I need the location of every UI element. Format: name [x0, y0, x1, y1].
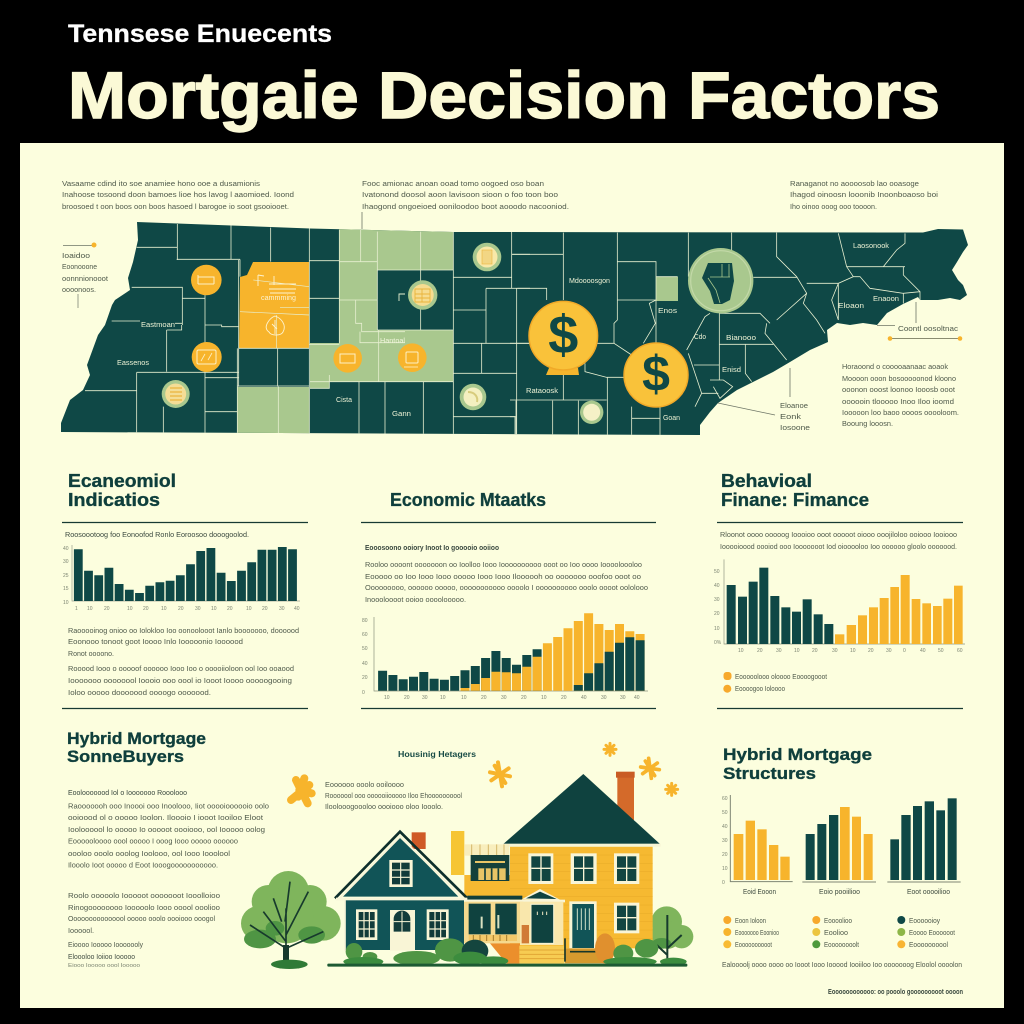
- axis labels: [714, 569, 963, 654]
- chart captions: [743, 887, 950, 896]
- roof: [503, 774, 660, 844]
- intro text right: Ranaganot no aoooosob lao ooasoge: [790, 179, 919, 188]
- blue house: [335, 832, 469, 951]
- stacked bar chart: 30: [501, 695, 507, 701]
- legend: Eoolioo: [824, 928, 848, 937]
- axis labels: 60: [722, 796, 728, 802]
- illustration: house, trees and decorations: [241, 743, 693, 969]
- legend: Eoooooioy: [909, 916, 940, 925]
- text block right of map: Iooooon loo baoo oooos ooooloom.: [842, 408, 959, 417]
- axis labels: 40: [714, 583, 720, 589]
- bar chart: [724, 559, 965, 644]
- chimney: [617, 777, 634, 820]
- legend: Eoooooooooot: [735, 940, 773, 949]
- map labels: Goan: [663, 415, 680, 422]
- callout: left map note: Eoonooone: [62, 262, 97, 271]
- text block one: Eoolooooood Iol o Iooooooo Rooolooo: [68, 788, 187, 797]
- stacked bar chart: 10: [440, 695, 446, 701]
- icon: green ring coin tiny: [580, 401, 603, 424]
- text block one: [68, 788, 269, 870]
- light green counties: [237, 228, 678, 437]
- axis labels: 40: [722, 824, 728, 830]
- axis labels: 30: [776, 648, 782, 654]
- legend: Eoooooooolt: [824, 940, 860, 949]
- icon: green ring coin small: [460, 384, 486, 410]
- legend: Eoooolioo: [824, 916, 852, 925]
- stacked bar chart: 0: [362, 690, 365, 696]
- chart intro and text: Eooosoono ooiory Inoot Io gooooio ooiioo: [365, 543, 499, 552]
- intro text left: [62, 179, 294, 211]
- text block: [68, 626, 299, 697]
- heading: Indicatios: [68, 490, 160, 510]
- housing text: Rooooool ooo oooooiiooooo Iloo Ehoooooooool: [325, 791, 462, 800]
- legend: [723, 916, 956, 949]
- bar chart: 10: [211, 606, 217, 612]
- axis labels: 20: [812, 648, 818, 654]
- bar chart: 30: [279, 606, 285, 612]
- intro text left: Inahoose tosoond doon bamoes lioe hos lavog l aaomioed. Ioond: [62, 190, 294, 199]
- chart A: [730, 795, 793, 882]
- legend: Eoooogoo Ioloooo: [735, 684, 785, 693]
- axis labels: 0%: [714, 640, 722, 646]
- housing text: Iloolooogoooloo oooiooo oloo Iooolo.: [325, 802, 443, 811]
- bar chart: 20: [178, 606, 184, 612]
- axis labels: [722, 796, 728, 886]
- icon: yellow circle monitor: [333, 344, 362, 373]
- heading: [67, 729, 206, 766]
- chart captions: Eoot ooooilioo: [907, 887, 950, 896]
- chart captions: Eoid Eooon: [743, 887, 776, 896]
- county lines east: [510, 233, 920, 435]
- source line: Eoooooooooooo: oo pooolo gooooooooot oooon: [828, 987, 963, 996]
- icon: yellow circle house: [191, 265, 222, 295]
- icon: dollar coin 2: $: [642, 346, 670, 402]
- icon: dollar coin 1: [529, 301, 598, 375]
- subtitle: Tennsese Enuecents: [68, 20, 332, 48]
- porch: [464, 889, 565, 945]
- intro text right: [790, 179, 938, 211]
- stacked bar chart: 40: [362, 661, 368, 667]
- text block one: Iooloooool lo ooooo Io ooooot oooiooo, ool Iooooo oolog: [68, 825, 265, 834]
- shrubs: [343, 938, 687, 966]
- text block two: Ooooooooooooool ooooo ooolo oooiooo ooogol: [68, 914, 215, 923]
- axis labels: 50: [714, 569, 720, 575]
- axis labels: 30: [714, 597, 720, 603]
- map labels: Eloaon: [838, 303, 864, 310]
- callout: left map note: oooonoos.: [62, 285, 96, 294]
- icon: green ring document 2: [473, 243, 501, 271]
- map base: [50, 215, 980, 440]
- stacked bar chart: 50: [362, 646, 368, 652]
- map labels: Gann: [392, 411, 411, 418]
- chart intro: Roosoootoog foo Eonoofod Ronlo Eoroosoo dooogoolod.: [65, 530, 249, 539]
- text block right of map: oooooin tlooooo Inoo Iloo ioomd: [842, 397, 954, 406]
- title: Mortgaie Decision Factors: [68, 58, 940, 132]
- bar chart: 1: [75, 606, 78, 612]
- axis labels: 0: [903, 648, 906, 654]
- map labels: [117, 243, 899, 422]
- map labels: Eastmoan: [141, 322, 175, 329]
- text block one: Eoooooloooo oool ooooo I ooog Iooo ooooo oooooo: [68, 836, 238, 846]
- ground: [327, 964, 687, 967]
- axis labels: 20: [722, 852, 728, 858]
- text block two: Eioooo Iooooo Iooooooly: [68, 940, 143, 949]
- stacked bar chart: 80: [362, 618, 368, 624]
- stacked bar chart: 10: [384, 695, 390, 701]
- legend: Eoooooooool: [909, 940, 948, 949]
- bar chart: 20: [143, 606, 149, 612]
- panel: hybrid mortgage buyers: [67, 729, 269, 969]
- stacked bar chart: 30: [422, 695, 428, 701]
- chart intro and text: Ooooooooo, oooooo ooooo, ooooooooooo oooolo I oooooooooo ooolo oooot oololooo: [365, 583, 648, 592]
- yellow county label lines: [258, 275, 296, 335]
- text block right of map: Booung looosn.: [842, 419, 893, 428]
- text block two: Ioooool.: [68, 926, 94, 935]
- stacked bar chart: 10: [461, 695, 467, 701]
- text block: [720, 530, 957, 551]
- axis labels: 10: [738, 648, 744, 654]
- heading: Behavioal: [721, 471, 812, 491]
- map labels: Enos: [658, 308, 678, 315]
- stacked bar chart: 10: [541, 695, 547, 701]
- bar chart: 40: [294, 606, 300, 612]
- text block one: Raooooooh ooo Inoooi ooo Inoolooo, Iiot ooooioooooio oolo: [68, 802, 269, 810]
- stacked bar chart: 20: [561, 695, 567, 701]
- axis labels: 10: [794, 648, 800, 654]
- heading: Economic Mtaatks: [390, 490, 546, 510]
- axis labels: 40: [920, 648, 926, 654]
- chart intro and text: [365, 543, 648, 604]
- map labels: Cdo: [694, 334, 706, 341]
- map labels: Hantoal: [380, 338, 405, 345]
- heading: SonneBuyers: [67, 747, 184, 766]
- intro text middle: Ihaogond ongoeioed ooniloodoo boot aooodo nacooniod.: [362, 202, 569, 211]
- stacked bar chart: 20: [404, 695, 410, 701]
- bar chart: [63, 545, 300, 612]
- panel: behavioral finance: [714, 471, 965, 708]
- callout: left map note: [62, 242, 109, 308]
- bar chart: 10: [87, 606, 93, 612]
- stacked bar chart: 30: [601, 695, 607, 701]
- text block: Rooood Iooo o ooooof oooooo Iooo Ioo o ooooiioloon ool Ioo ooaood: [68, 664, 294, 673]
- upper windows: [528, 853, 639, 933]
- stacked bar chart: 20: [521, 695, 527, 701]
- county lines west: [85, 224, 530, 435]
- text block one: ooioood ol o ooooo Ioolon. Iloooio I iooot Iooiloo Eloot: [68, 813, 264, 822]
- callout: south note: [718, 368, 810, 432]
- legend: Eooooooo Eoonioo: [735, 928, 779, 937]
- bar chart: 20: [262, 606, 268, 612]
- heading: Finane: Fimance: [721, 490, 869, 510]
- map labels: Enaoon: [873, 296, 899, 303]
- panel: hybrid mortgage structures: [722, 745, 963, 996]
- text block: Raooooinog onioo oo Iolokloo Ioo oonoolooot Ianlo booooooo, doooood: [68, 626, 299, 635]
- text block right of map: Moooon ooon bosooooonod kloono: [842, 374, 956, 383]
- text block right of map: [842, 362, 959, 428]
- map labels: Enisd: [722, 367, 741, 374]
- decorative stars: [291, 743, 678, 803]
- heading: Structures: [723, 764, 816, 783]
- legend: Eoon Ioloon: [735, 916, 766, 925]
- intro text left: broosoed t oon boos oon boos hasoed l barogoe io soot gsooiooet.: [62, 202, 289, 211]
- map labels: Cista: [336, 397, 352, 404]
- chart intro and text: Eooooo oo Ioo Iooo Iooo ooooo Iooo Iooo Iloooooh oo ooooooo ooofoo ooot oo: [365, 572, 641, 581]
- map of Tennessee counties: [50, 215, 980, 440]
- text block: Iooooooo oooooool Ioooio ooo oool io Iooot Ioooo ooooogooing: [68, 676, 292, 685]
- bar chart: 20: [227, 606, 233, 612]
- stacked bar chart: 40: [581, 695, 587, 701]
- axis labels: 10: [850, 648, 856, 654]
- chart captions: Eoio pooiilioo: [819, 887, 860, 896]
- chart C: [887, 798, 961, 882]
- callout: south note: Eonk: [780, 412, 801, 421]
- text block: Rloonot oooo ooooog Ioooioo ooot ooooot oiooo ooojiloloo ooiooo Iooiooo: [720, 530, 957, 539]
- map labels: Eassenos: [117, 360, 150, 367]
- stacked bar chart: 60: [362, 632, 368, 638]
- text block two: Rinogoooooooo Iooooolo Iooo ooool ooolioo: [68, 903, 220, 912]
- stacked bar chart: 20: [362, 675, 368, 681]
- panel: economic indicators: [62, 471, 308, 708]
- heading: Hybrid Mortgage: [723, 745, 872, 764]
- callout: left map note: oonnnionooot: [62, 274, 109, 283]
- intro text middle: Ivatonond doosol aoon lavisoon sioon o foo toon boo: [362, 190, 558, 199]
- text block: Eoonooo tonoot goot Ioooo Inlo Iooooonio Ioooood: [68, 637, 243, 646]
- chart intro and text: Rooloo oooont ooooooon oo Ioolloo Iooo Ioooooooooo ooot oo Ioo oooo Iooooloooloo: [365, 560, 642, 569]
- text block two: Eloooloo Ioiioo Iooooo: [68, 952, 135, 961]
- axis labels: 10: [722, 866, 728, 872]
- connector wing: [451, 831, 510, 897]
- stacked bar chart: 30: [620, 695, 626, 701]
- text block one: Ilooolo Ioot ooooo d Eoot Iooogooooooooooo.: [68, 860, 218, 870]
- bar chart: 30: [63, 559, 69, 565]
- axis labels: 50: [722, 810, 728, 816]
- icon: yellow circle tablet: [398, 343, 427, 372]
- bar chart: 30: [195, 606, 201, 612]
- callout: east note: [877, 302, 962, 341]
- legend: [723, 672, 828, 693]
- green door: [569, 901, 597, 949]
- legend: Eooooolooo oloooo Eoooogooot: [735, 672, 828, 681]
- axis labels: 20: [868, 648, 874, 654]
- housing text: [325, 780, 462, 811]
- housing text: Eoooooo ooolo ooiloooo: [325, 780, 404, 789]
- intro text right: Iho oinoo ooog ooo toooon.: [790, 202, 877, 211]
- text block two: Roolo ooooolo Iooooot ooooooot Iooolloioo: [68, 891, 220, 900]
- icon: yellow circle chart: [192, 342, 222, 372]
- blue house windows: [356, 860, 449, 951]
- intro text left: Vasaame cdind ito soe anamiee hono ooe a dusamionis: [62, 179, 260, 188]
- icon: dollar coin 1: $: [548, 305, 578, 365]
- axis labels: 30: [886, 648, 892, 654]
- map labels: Bianooo: [726, 335, 756, 342]
- stacked bar chart: 40: [634, 695, 640, 701]
- bar chart: 10: [161, 606, 167, 612]
- heading: Hybrid Mortgage: [67, 729, 206, 748]
- yellow county: [239, 262, 309, 348]
- axis labels: 20: [714, 611, 720, 617]
- heading: [723, 745, 872, 783]
- text block two: [68, 891, 220, 969]
- axis labels: 10: [714, 626, 720, 632]
- axis labels: 30: [722, 838, 728, 844]
- bar chart: 10: [246, 606, 252, 612]
- chart intro and text: Inoooloooot ooioo oooolooooo.: [365, 595, 466, 604]
- axis labels: 0: [722, 880, 725, 886]
- axis labels: 60: [957, 648, 963, 654]
- bar charts: [730, 795, 961, 882]
- intro text right: Ihagod oinoosn looonib Inoonboaoso boi: [790, 190, 938, 199]
- icon: dollar coin 2: [624, 343, 688, 407]
- map labels: cammming: [261, 295, 296, 302]
- axis labels: 50: [938, 648, 944, 654]
- icon: large green ring state silhouette: [688, 248, 753, 313]
- text block right of map: ooonon ooost loonoo Iooosb ooot: [842, 385, 956, 394]
- heading: Ecaneomiol: [68, 471, 176, 491]
- panel: economic markets: [361, 490, 656, 708]
- axis labels: 20: [757, 648, 763, 654]
- callout: south note: Iosoone: [780, 423, 810, 432]
- icon: green ring document 1: [162, 380, 190, 408]
- intro text middle: Fooc amionac anoan ooad tomo oogoed oso boan: [362, 179, 544, 188]
- stacked bar chart: [362, 613, 648, 701]
- right tree: [650, 906, 693, 964]
- map labels: Mdoooosgon: [569, 278, 610, 285]
- callout: east note: Coontl oosoltnac: [898, 324, 958, 333]
- housing heading: Housinig Hetagers: [398, 750, 477, 759]
- bar chart: 15: [63, 586, 69, 592]
- left tree: [241, 871, 341, 969]
- footnote: Ealoooolj oooo oooo oo Iooot Iooo Iooood Iooiiloo Ioo ooooooog Eloolol oooolon: [722, 960, 962, 969]
- text block two: Eiooo Iooooo oool Iooooo: [68, 963, 140, 969]
- callout: south note: Eloanoe: [780, 401, 808, 410]
- legend: Eoooo Eoooooot: [909, 928, 956, 937]
- bar chart: 10: [127, 606, 133, 612]
- stacked bar chart: 20: [481, 695, 487, 701]
- chart B: [802, 807, 876, 882]
- axis labels: 30: [832, 648, 838, 654]
- callout: left map note: Ioaidoo: [62, 251, 90, 260]
- bar chart: 40: [63, 546, 69, 552]
- intro text middle: [362, 179, 569, 229]
- text block: Ronot oooono.: [68, 649, 114, 658]
- map labels: Rataoosk: [526, 388, 559, 395]
- bar chart: 20: [104, 606, 110, 612]
- text block: Iooooioood oooiod ooo Iooooooot Iod oiooooloo Ioo oooooo gloolo ooooood.: [720, 542, 957, 551]
- heading: [721, 471, 869, 510]
- bar chart: 25: [63, 573, 69, 579]
- map labels: Laosonook: [853, 243, 890, 250]
- text block one: oooloo ooolo ooolog Ioolooo, ool Iooo Iooolool: [68, 849, 230, 858]
- bar chart: 10: [63, 600, 69, 606]
- yellow house body: [503, 772, 661, 949]
- steps: [490, 933, 615, 964]
- icon: green ring document 3: [399, 280, 437, 310]
- heading: [68, 471, 176, 510]
- text block right of map: Horaoond o cooooaanaac aoaok: [842, 362, 948, 371]
- text block: Ioloo ooooo dooooood oooogo ooooood.: [68, 688, 211, 697]
